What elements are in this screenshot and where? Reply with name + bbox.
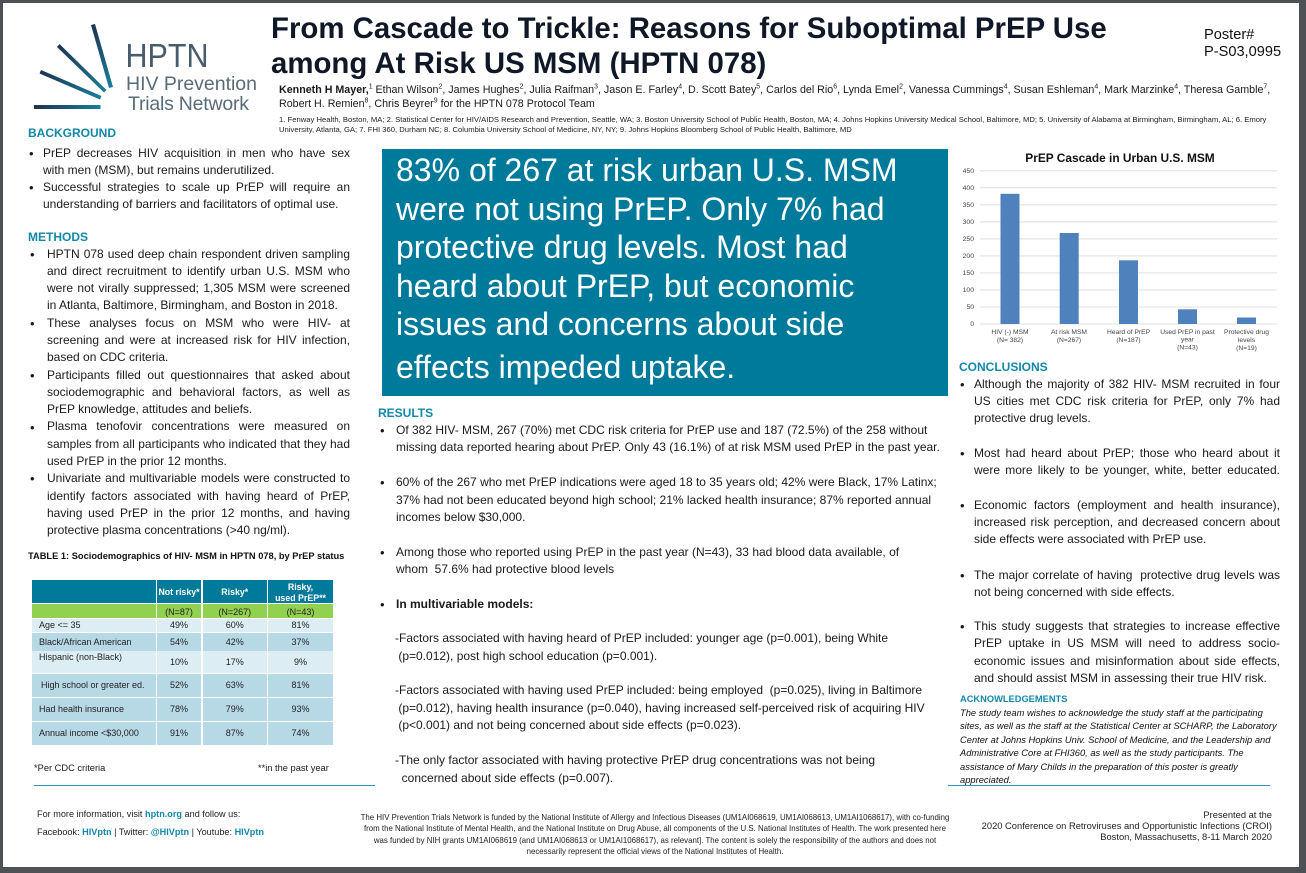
- poster number: Poster#: [1204, 26, 1254, 42]
- table: sociodemographics: 78%: [170, 704, 188, 714]
- footer: presented at: Boston, Massachusetts, 8-11 March 2020: [1100, 832, 1272, 842]
- acknowledgements: sites, as well as the staff at the Statistical Center at SCHARP, the Laboratory: [960, 721, 1277, 731]
- chart: PrEP cascade: (N= 382): [997, 337, 1023, 344]
- panel: methods: •: [30, 368, 35, 383]
- panel: background: BACKGROUND: [28, 126, 116, 140]
- logo: HPTN: HIV Prevention: [126, 73, 257, 95]
- footer: contact: Facebook: HIVptn | Twitter: @HIVptn | Youtube: HIVptn: [37, 827, 264, 837]
- panel: methods: having used PrEP in the prior 12 months, and having: [47, 506, 350, 520]
- chart: PrEP cascade: levels: [1238, 337, 1256, 344]
- chart: PrEP cascade: (N=19): [1236, 345, 1257, 352]
- conclusion 3: [960, 498, 1280, 546]
- panel: results: [378, 406, 940, 785]
- result: used: [395, 683, 925, 732]
- callout: key finding: effects impeded uptake.: [396, 349, 735, 385]
- footer: presented at: Presented at the: [1203, 810, 1272, 820]
- panel: methods: samples from all participants who indicated that they had: [47, 437, 350, 451]
- panel: methods: based on CDC criteria.: [47, 350, 168, 364]
- callout: key finding: protective drug levels. Most had: [396, 229, 848, 265]
- panel: methods: identify factors associated with having heard of PrEP,: [47, 489, 350, 503]
- table: sociodemographics: 81%: [291, 680, 310, 690]
- panel: methods: These analyses focus on MSM who were HIV- at: [47, 316, 350, 330]
- footer: contact: [37, 809, 264, 837]
- chart: PrEP cascade: [962, 151, 1277, 352]
- panel: background: with men (MSM), but remains underutilized.: [43, 163, 274, 177]
- result: demographics: [396, 475, 937, 524]
- poster number: [1204, 26, 1281, 60]
- panel: methods: Plasma tenofovir concentrations were measured on: [47, 419, 350, 433]
- table: sociodemographics: (N=267): [218, 607, 251, 617]
- table: sociodemographics: 74%: [291, 728, 310, 738]
- panel: methods: •: [30, 246, 35, 262]
- table: sociodemographics: used PrEP**: [275, 593, 326, 603]
- result: blood levels: whom 57.6% had protective blood levels: [396, 562, 614, 576]
- table: sociodemographics: [32, 580, 333, 745]
- result: cascade: [396, 423, 940, 454]
- conclusion 4: •: [960, 568, 965, 582]
- poster number: P-S03,0995: [1204, 44, 1281, 60]
- chart: PrEP cascade: Protective drug: [1224, 329, 1269, 336]
- table: sociodemographics: (N=87): [165, 607, 193, 617]
- panel: methods: sociodemographic and behavioral factors, as well as: [47, 385, 350, 399]
- table: sociodemographics: Age <= 35: [39, 620, 81, 630]
- panel: results: •: [380, 423, 385, 438]
- table: sociodemographics: 9%: [294, 657, 307, 667]
- panel: methods: Participants filled out questionnaires that asked about: [47, 368, 350, 382]
- conclusion 5: [960, 619, 1280, 685]
- result: protective: -The only factor associated with having protective PrEP drug concentrations was not being: [395, 753, 875, 767]
- result: used: -Factors associated with having used PrEP included: being employed (p=0.025), living in Baltimore: [395, 683, 922, 697]
- panel: methods: •: [30, 471, 35, 486]
- panel: background: •: [29, 146, 34, 160]
- conclusion 3: increased risk perception, and decreased concern about: [974, 515, 1280, 529]
- conclusion 1: protective drug levels.: [974, 411, 1091, 425]
- panel: conclusions: [959, 360, 1280, 685]
- table: sociodemographics: 81%: [291, 620, 310, 630]
- panel: methods: were not virally suppressed; 1,305 MSM were screened: [47, 281, 350, 295]
- conclusion 3: •: [960, 498, 965, 512]
- table: sociodemographics: Had health insurance: [39, 704, 124, 714]
- chart: PrEP cascade: 400: [963, 185, 974, 192]
- callout: key finding: were not using PrEP. Only 7% had: [396, 190, 885, 226]
- footer: presented at: 2020 Conference on Retroviruses and Opportunistic Infections (CROI): [982, 821, 1272, 831]
- panel: background: [28, 126, 350, 211]
- panel: methods: in Atlanta, Baltimore, Birmingham, and Boston in 2018.: [47, 298, 338, 312]
- chart: PrEP cascade: 0: [970, 321, 974, 328]
- chart: PrEP cascade: Heard of PrEP: [1107, 329, 1151, 336]
- table: sociodemographics: 60%: [226, 620, 244, 630]
- table: sociodemographics: 10%: [170, 657, 188, 667]
- table: sociodemographics: 17%: [226, 657, 244, 667]
- table: sociodemographics: High school or greater ed.: [41, 680, 145, 690]
- table: sociodemographics: 93%: [291, 704, 310, 714]
- conclusion 5: and should assist MSM in assessing their true HIV risk.: [974, 671, 1267, 685]
- table: sociodemographics: Black/African American: [39, 636, 132, 646]
- conclusion 4: [960, 568, 1280, 599]
- chart: PrEP cascade: (N=267): [1057, 337, 1081, 344]
- conclusion 5: This study suggests that strategies to increase effective: [974, 619, 1280, 633]
- table: sociodemographics: Not risky*: [158, 586, 200, 596]
- result: cascade: missing data reported hearing about PrEP. Only 43 (16.1%) of at risk MSM used PrEP in the past year.: [396, 440, 940, 454]
- table: sociodemographics: 63%: [226, 680, 244, 690]
- conclusion 4: The major correlate of having protective drug levels was: [974, 568, 1280, 582]
- acknowledgements: The study team wishes to acknowledge the study staff at the participating: [960, 708, 1263, 718]
- chart: PrEP cascade: 200: [963, 253, 974, 260]
- callout: key finding: heard about PrEP, but economic: [396, 268, 854, 304]
- acknowledgements: assistance of Mary Childs in the preparation of this poster is greatly: [960, 762, 1238, 772]
- result: blood levels: Among those who reported using PrEP in the past year (N=43), 33 had blood data available, of: [396, 545, 899, 559]
- chart: PrEP cascade: 300: [963, 219, 974, 226]
- footer: funding: The HIV Prevention Trials Network is funded by the National Institute of Allergy and Infectious Diseases (UM1AI068619, UM1AI068613, UM1AI1068617), with co-funding: [361, 812, 949, 822]
- conclusion 5: economic issues and misinformation about side effects,: [974, 654, 1280, 668]
- panel: results: •: [380, 475, 385, 490]
- affiliations: University, Atlanta, GA; 7. FHI 360, Durham NC; 8. Columbia University School of Medicine, NY, NY; 9. Johns Hopkins Bloomberg School of Public Health, Baltimore, MD: [279, 125, 852, 134]
- chart: PrEP cascade: 100: [963, 287, 974, 294]
- panel: background: •: [29, 180, 34, 195]
- result: demographics: incomes below $30,000.: [396, 510, 525, 524]
- panel: methods: METHODS: [28, 230, 88, 244]
- result: protective: [395, 753, 875, 785]
- panel: results: RESULTS: [378, 406, 433, 420]
- panel: methods: Univariate and multivariable models were constructed to: [47, 471, 350, 485]
- panel: methods: •: [30, 420, 35, 434]
- authors: Robert H. Remien8, Chris Beyrer9 for the HPTN 078 Protocol Team: [279, 97, 595, 110]
- table: sociodemographics: Hispanic (non-Black): [39, 652, 122, 662]
- conclusion 2: Most had heard about PrEP; those who heard about it: [974, 446, 1280, 460]
- footer: funding: from the National Institute of Mental Health, and the National Institute on Drug Abuse, all components of the U.S. National Institutes of Health. The work presented here: [364, 824, 946, 833]
- chart: PrEP cascade: PrEP Cascade in Urban U.S. MSM: [1025, 151, 1215, 165]
- panel: methods: used PrEP in the prior 12 months.: [47, 454, 227, 468]
- title: From Cascade to Trickle: Reasons for Suboptimal PrEP Use: [271, 12, 1107, 45]
- table: sociodemographics: 37%: [291, 636, 310, 646]
- table: sociodemographics: Risky,: [288, 582, 313, 592]
- result: heard: [395, 631, 888, 663]
- logo: HPTN: [34, 24, 257, 115]
- table: sociodemographics: 52%: [170, 680, 188, 690]
- table footnote: past year: **in the past year: [258, 763, 329, 773]
- table: sociodemographics: 49%: [170, 620, 188, 630]
- chart: PrEP cascade: 350: [963, 202, 974, 209]
- table: sociodemographics: 91%: [170, 728, 188, 738]
- logo: HPTN: Trials Network: [128, 93, 249, 115]
- table: sociodemographics: 54%: [170, 636, 188, 646]
- result: blood levels: [396, 545, 900, 576]
- table footnote: criteria: *Per CDC criteria: [34, 763, 105, 773]
- conclusion 2: [960, 446, 1280, 477]
- conclusion 4: not being concerned with side effects.: [974, 585, 1175, 599]
- result: protective: concerned about side effects (p=0.007).: [402, 771, 613, 785]
- logo: HPTN: HPTN: [126, 37, 208, 74]
- chart: PrEP cascade: year: [1181, 336, 1195, 344]
- panel: results: •: [380, 597, 385, 612]
- footer: funding: necessarily represent the official views of the National Institutes of Health.: [527, 847, 783, 856]
- conclusion 5: PrEP uptake in US MSM will need to address socio-: [974, 636, 1280, 650]
- result: heard: (p=0.012), post high school education (p=0.001).: [398, 649, 657, 663]
- affiliations: 1. Fenway Health, Boston, MA; 2. Statistical Center for HIV/AIDS Research and Prevention, Seattle, WA; 3. Boston University School of Public Health, Boston, MA; 4. Johns Hopkins University Medical School, Baltimore, MD; 5. University of Alabama at Birmingham, Birmingham, AL; 6. Emory: [279, 115, 1266, 124]
- result: models heading: In multivariable models:: [396, 597, 533, 611]
- conclusion 2: •: [960, 446, 965, 460]
- panel: methods: HPTN 078 used deep chain respondent driven sampling: [47, 246, 350, 260]
- panel: methods: [28, 230, 350, 537]
- result: used: (p=0.012), having health insurance (p=0.040), having increased self-perceived risk of acquiring HIV: [398, 700, 925, 714]
- callout: key finding: [382, 149, 948, 396]
- affiliations: [279, 115, 1266, 134]
- result: heard: -Factors associated with having heard of PrEP included: younger age (p=0.001), being White: [395, 631, 888, 645]
- chart: PrEP cascade: 50: [966, 304, 974, 311]
- result: demographics: 37% had not been educated beyond high school; 21% lacked health insurance; 87% reported annual: [396, 492, 931, 506]
- acknowledgements: Administrative Core at FHI360, as well as the study participants. The: [960, 748, 1244, 758]
- chart: PrEP cascade: 150: [963, 270, 974, 277]
- conclusion 2: were more likely to be younger, white, better educated.: [974, 463, 1280, 477]
- result: cascade: Of 382 HIV- MSM, 267 (70%) met CDC risk criteria for PrEP use and 187 (72.5%) of the 258 without: [396, 423, 927, 437]
- chart: PrEP cascade: 250: [963, 236, 974, 243]
- panel: background: Successful strategies to scale up PrEP will require an: [43, 180, 350, 194]
- conclusion 1: •: [960, 376, 965, 392]
- conclusion 1: US cities met CDC risk criteria for PrEP, only 7% had: [974, 394, 1280, 408]
- conclusion 3: side effects were associated with PrEP use.: [974, 532, 1206, 546]
- authors: Kenneth H Mayer,1 Ethan Wilson2, James Hughes2, Julia Raifman3, Jason E. Farley4, D. Scott Batey5, Carlos del Rio6, Lynda Emel2, Vanessa Cummings4, Susan Eshleman4, Mark Marzinke4, Theresa Gamble7,: [279, 83, 1270, 96]
- footer: contact: For more information, visit hptn.org and follow us:: [37, 809, 240, 819]
- panel: methods: •: [30, 316, 35, 331]
- callout: key finding: issues and concerns about side: [396, 306, 844, 342]
- table: sociodemographics: (N=43): [287, 607, 314, 617]
- authors: [279, 83, 1270, 110]
- conclusion 5: •: [960, 619, 965, 634]
- table: sociodemographics: 79%: [226, 704, 244, 714]
- panel: background: PrEP decreases HIV acquisition in men who have sex: [43, 146, 350, 160]
- table: sociodemographics: 87%: [226, 728, 244, 738]
- chart: PrEP cascade: 450: [963, 168, 974, 175]
- chart: PrEP cascade: HIV (-) MSM: [991, 329, 1029, 336]
- panel: methods: protective plasma concentrations (>40 ng/ml).: [47, 523, 290, 537]
- acknowledgements: Center at Johns Hopkins Univ. School of Medicine, and the Leadership and: [960, 734, 1270, 744]
- panel: methods: screening and were at increased risk for HIV infection,: [47, 333, 350, 347]
- conclusion 1: Although the majority of 382 HIV- MSM recruited in four: [974, 376, 1280, 390]
- table: sociodemographics: Risky*: [221, 586, 248, 596]
- chart: PrEP cascade: (N=43): [1177, 344, 1198, 352]
- panel: conclusions: CONCLUSIONS: [959, 360, 1048, 374]
- panel: methods: PrEP knowledge, attitudes and beliefs.: [47, 402, 252, 416]
- conclusion 1: [960, 376, 1280, 425]
- chart: PrEP cascade: At risk MSM: [1051, 329, 1087, 336]
- title: among At Risk US MSM (HPTN 078): [271, 47, 766, 80]
- acknowledgements: [960, 694, 1278, 785]
- acknowledgements: appreciated.: [960, 775, 1011, 785]
- table heading: TABLE 1: Sociodemographics of HIV- MSM in HPTN 078, by PrEP status: [28, 551, 344, 561]
- table: sociodemographics: 42%: [226, 636, 244, 646]
- chart: PrEP cascade: (N=187): [1116, 337, 1141, 344]
- result: used: (p<0.001) and not being concerned about side effects (p=0.023).: [398, 718, 741, 732]
- footer: funding: was funded by NIH grants UM1AI068619 (and UM1AI068613 or UM1AI1068617), as relevant]. The content is solely the responsibility of the authors and does not: [374, 836, 936, 844]
- conclusion 3: Economic factors (employment and health insurance),: [974, 498, 1280, 512]
- callout: key finding: 83% of 267 at risk urban U.S. MSM: [396, 152, 898, 188]
- footer: presented at: [982, 810, 1272, 842]
- result: demographics: 60% of the 267 who met PrEP indications were aged 18 to 35 years old; 42% were Black, 17% Latinx;: [396, 475, 937, 489]
- panel: methods: and direct recruitment to identify urban U.S. MSM who: [47, 264, 350, 278]
- panel: results: •: [380, 545, 385, 560]
- title: [271, 12, 1107, 80]
- footer: funding: [360, 812, 949, 856]
- panel: background: understanding of barriers and facilitators of optimal use.: [43, 197, 338, 211]
- acknowledgements: ACKNOWLEDGEMENTS: [960, 694, 1067, 704]
- table: sociodemographics: Annual income <$30,000: [39, 728, 139, 738]
- chart: PrEP cascade: Used PrEP in past: [1160, 329, 1215, 336]
